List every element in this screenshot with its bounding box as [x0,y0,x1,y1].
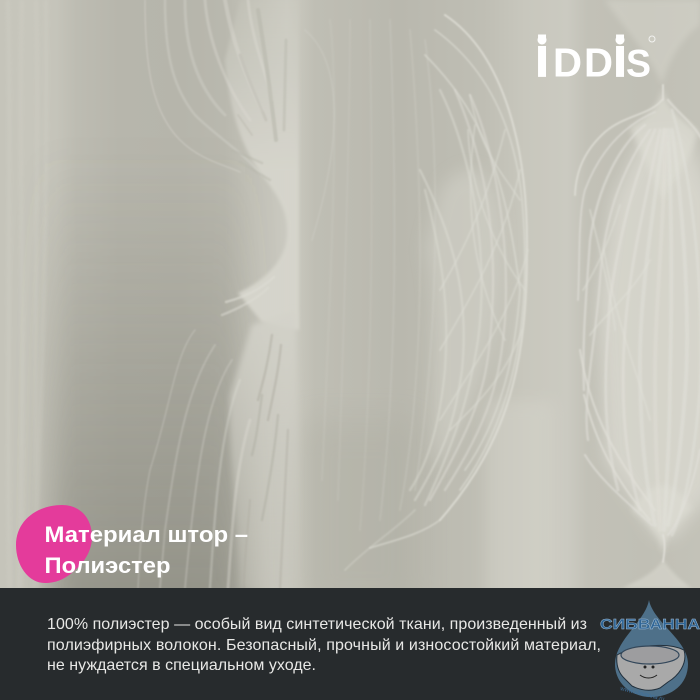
logo: iDDiS: D [584,40,613,86]
panel: dark description bar [0,588,700,700]
pattern: left strip faint stripes [8,0,46,588]
logo: iDDiS: S [626,42,651,86]
watermark text: brand: СИБВАННА [600,616,700,633]
pattern: left motif lower fan [138,310,299,588]
icon: bath [617,645,685,690]
pattern: left motif upper fan [145,0,299,330]
text: description: полиэфирных волокон. Безопасный, прочный и износостойкий материал, [47,637,601,654]
heading: material title: Материал штор – [44,522,248,547]
logo: iDDiS: i [612,25,628,90]
pattern: middle oval arcs [345,14,528,570]
text: description [47,616,601,674]
logo: iDDiS: D [553,40,582,86]
heading: material title: Полиэстер [44,553,170,578]
heading: material title [44,522,248,578]
text: description: 100% полиэстер — особый вид синтетической ткани, произведенный из [47,616,587,633]
pattern: right motif fan and necks [575,0,700,588]
logo: iDDiS: i [534,25,550,90]
watermark: Sibvanna bath in water drop [600,600,700,700]
accent: pink blob [16,505,92,583]
logo: iDDiS [534,25,655,90]
icon: water drop [615,600,688,697]
text: description: не нуждается в специальном уходе. [47,657,316,674]
logo: registered mark [649,36,655,42]
